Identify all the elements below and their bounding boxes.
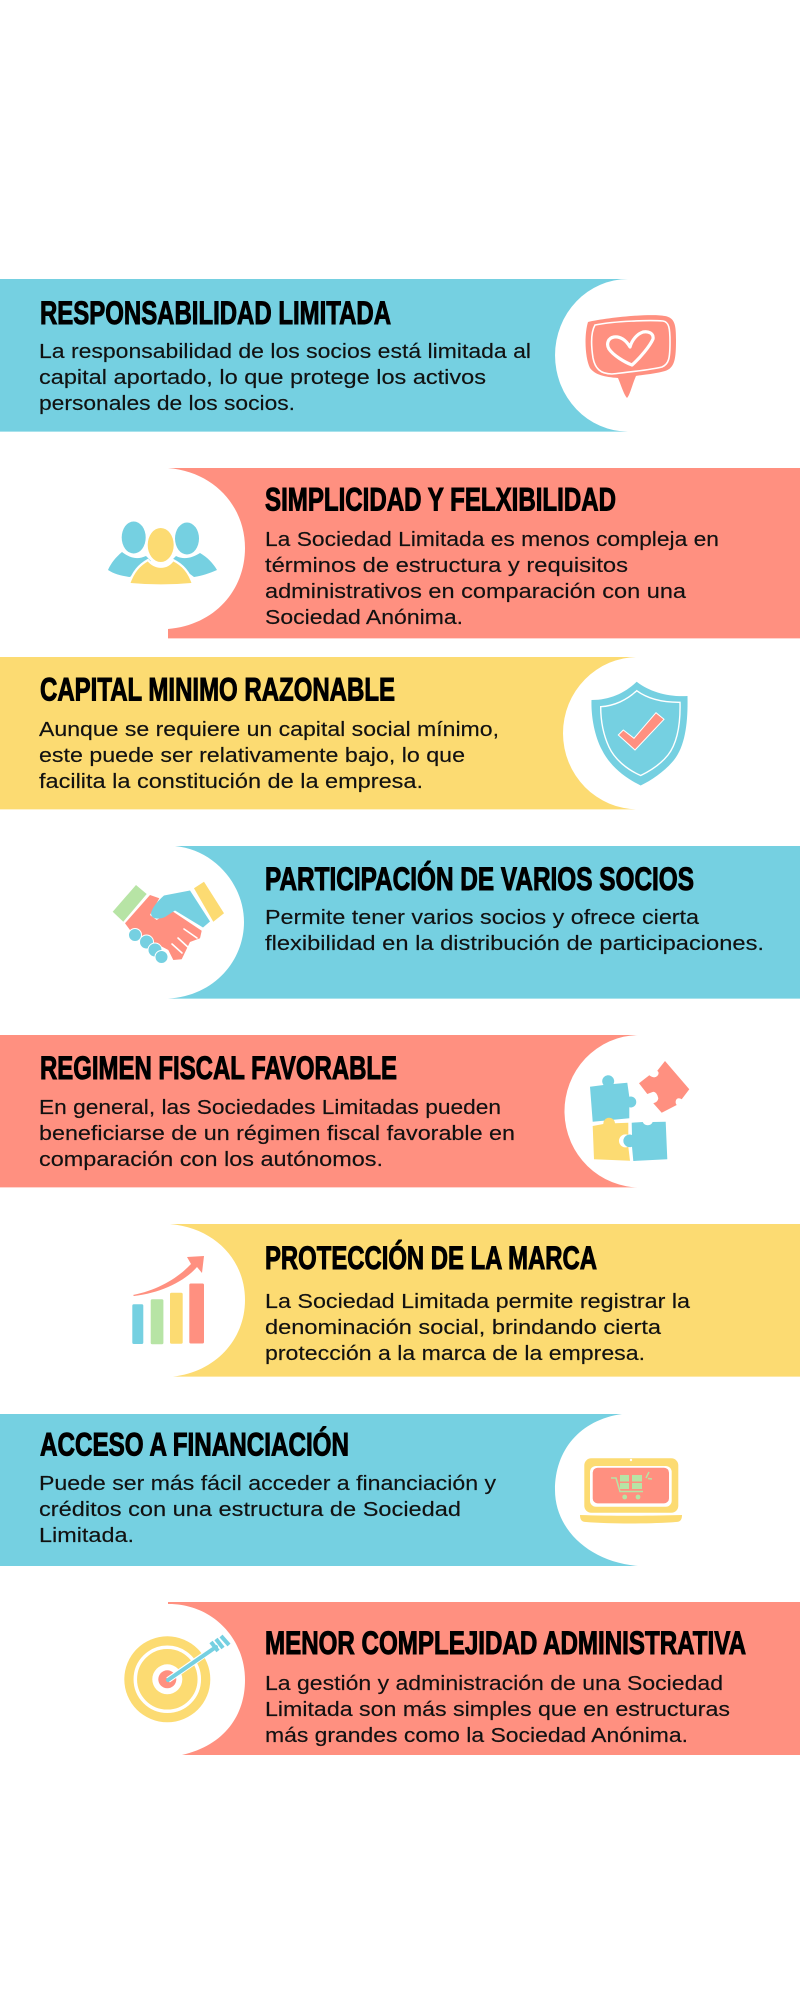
text block: más grandes como la Sociedad Anónima.	[265, 1725, 688, 1747]
text block: La Sociedad Limitada es menos compleja en	[265, 529, 719, 551]
text block: Permite tener varios socios y ofrece cierta	[265, 907, 700, 929]
icon: group of people	[108, 522, 217, 586]
icon: target with arrow	[124, 1636, 229, 1722]
text block	[39, 719, 499, 793]
heading: REGIMEN FISCAL FAVORABLE	[40, 1050, 397, 1086]
panel: proteccion de la marca	[132, 1224, 800, 1377]
text block: Aunque se requiere un capital social mínimo,	[39, 719, 499, 741]
text block: administrativos en comparación con una	[265, 581, 687, 603]
text block: comparación con los autónomos.	[39, 1149, 383, 1171]
heading: RESPONSABILIDAD LIMITADA	[40, 295, 391, 331]
icon: rising bar chart	[132, 1256, 204, 1344]
panel: responsabilidad limitada	[0, 279, 676, 432]
panel: simplicidad y flexibilidad	[108, 468, 800, 638]
text block: términos de estructura y requisitos	[265, 555, 628, 577]
text block: denominación social, brindando cierta	[265, 1317, 662, 1339]
text block: créditos con una estructura de Sociedad	[39, 1499, 461, 1521]
text block	[265, 1673, 730, 1747]
text block: Sociedad Anónima.	[265, 607, 463, 629]
panel: capital minimo razonable	[0, 657, 688, 809]
panel: acceso a financiacion	[0, 1414, 682, 1566]
heading: PROTECCIÓN DE LA MARCA	[265, 1240, 597, 1276]
band: yellow	[170, 1224, 800, 1377]
text block: En general, las Sociedades Limitadas pueden	[39, 1097, 501, 1119]
panel: participacion de varios socios	[113, 846, 800, 999]
text block	[265, 529, 719, 629]
band: coral	[168, 468, 800, 638]
text block: La Sociedad Limitada permite registrar la	[265, 1291, 691, 1313]
text block	[265, 907, 764, 955]
icon: shield with check	[591, 682, 688, 786]
icon: puzzle pieces	[590, 1061, 689, 1161]
text block: Limitada.	[39, 1525, 134, 1547]
text block: capital aportado, lo que protege los activos	[39, 367, 486, 389]
band: blue	[168, 846, 800, 999]
text block	[39, 1473, 496, 1547]
text block	[39, 1097, 515, 1171]
band: yellow	[0, 657, 638, 809]
text block: protección a la marca de la empresa.	[265, 1343, 645, 1365]
icon: handshake	[113, 882, 224, 964]
heading: SIMPLICIDAD Y FELXIBILIDAD	[265, 482, 616, 518]
band: coral	[168, 1602, 800, 1755]
band: coral	[0, 1035, 641, 1187]
text block: beneficiarse de un régimen fiscal favorable en	[39, 1123, 515, 1145]
text block	[265, 1291, 691, 1365]
text block: personales de los socios.	[39, 393, 295, 415]
heading: ACCESO A FINANCIACIÓN	[40, 1426, 349, 1462]
icon: speech bubble with heart	[586, 315, 676, 398]
panel: menor complejidad administrativa	[124, 1602, 800, 1755]
text block: facilita la constitución de la empresa.	[39, 771, 423, 793]
panel: regimen fiscal favorable	[0, 1035, 689, 1187]
text block: La gestión y administración de una Sociedad	[265, 1673, 723, 1695]
band: blue	[0, 279, 628, 432]
heading: CAPITAL MINIMO RAZONABLE	[40, 672, 395, 708]
text block	[39, 341, 531, 415]
band: blue	[0, 1414, 638, 1566]
text block: La responsabilidad de los socios está limitada al	[39, 341, 531, 363]
icon: laptop with shopping cart	[580, 1458, 682, 1524]
text block: Puede ser más fácil acceder a financiación y	[39, 1473, 496, 1495]
text block: este puede ser relativamente bajo, lo que	[39, 745, 465, 767]
text block: flexibilidad en la distribución de participaciones.	[265, 933, 764, 955]
text block: Limitada son más simples que en estructuras	[265, 1699, 730, 1721]
